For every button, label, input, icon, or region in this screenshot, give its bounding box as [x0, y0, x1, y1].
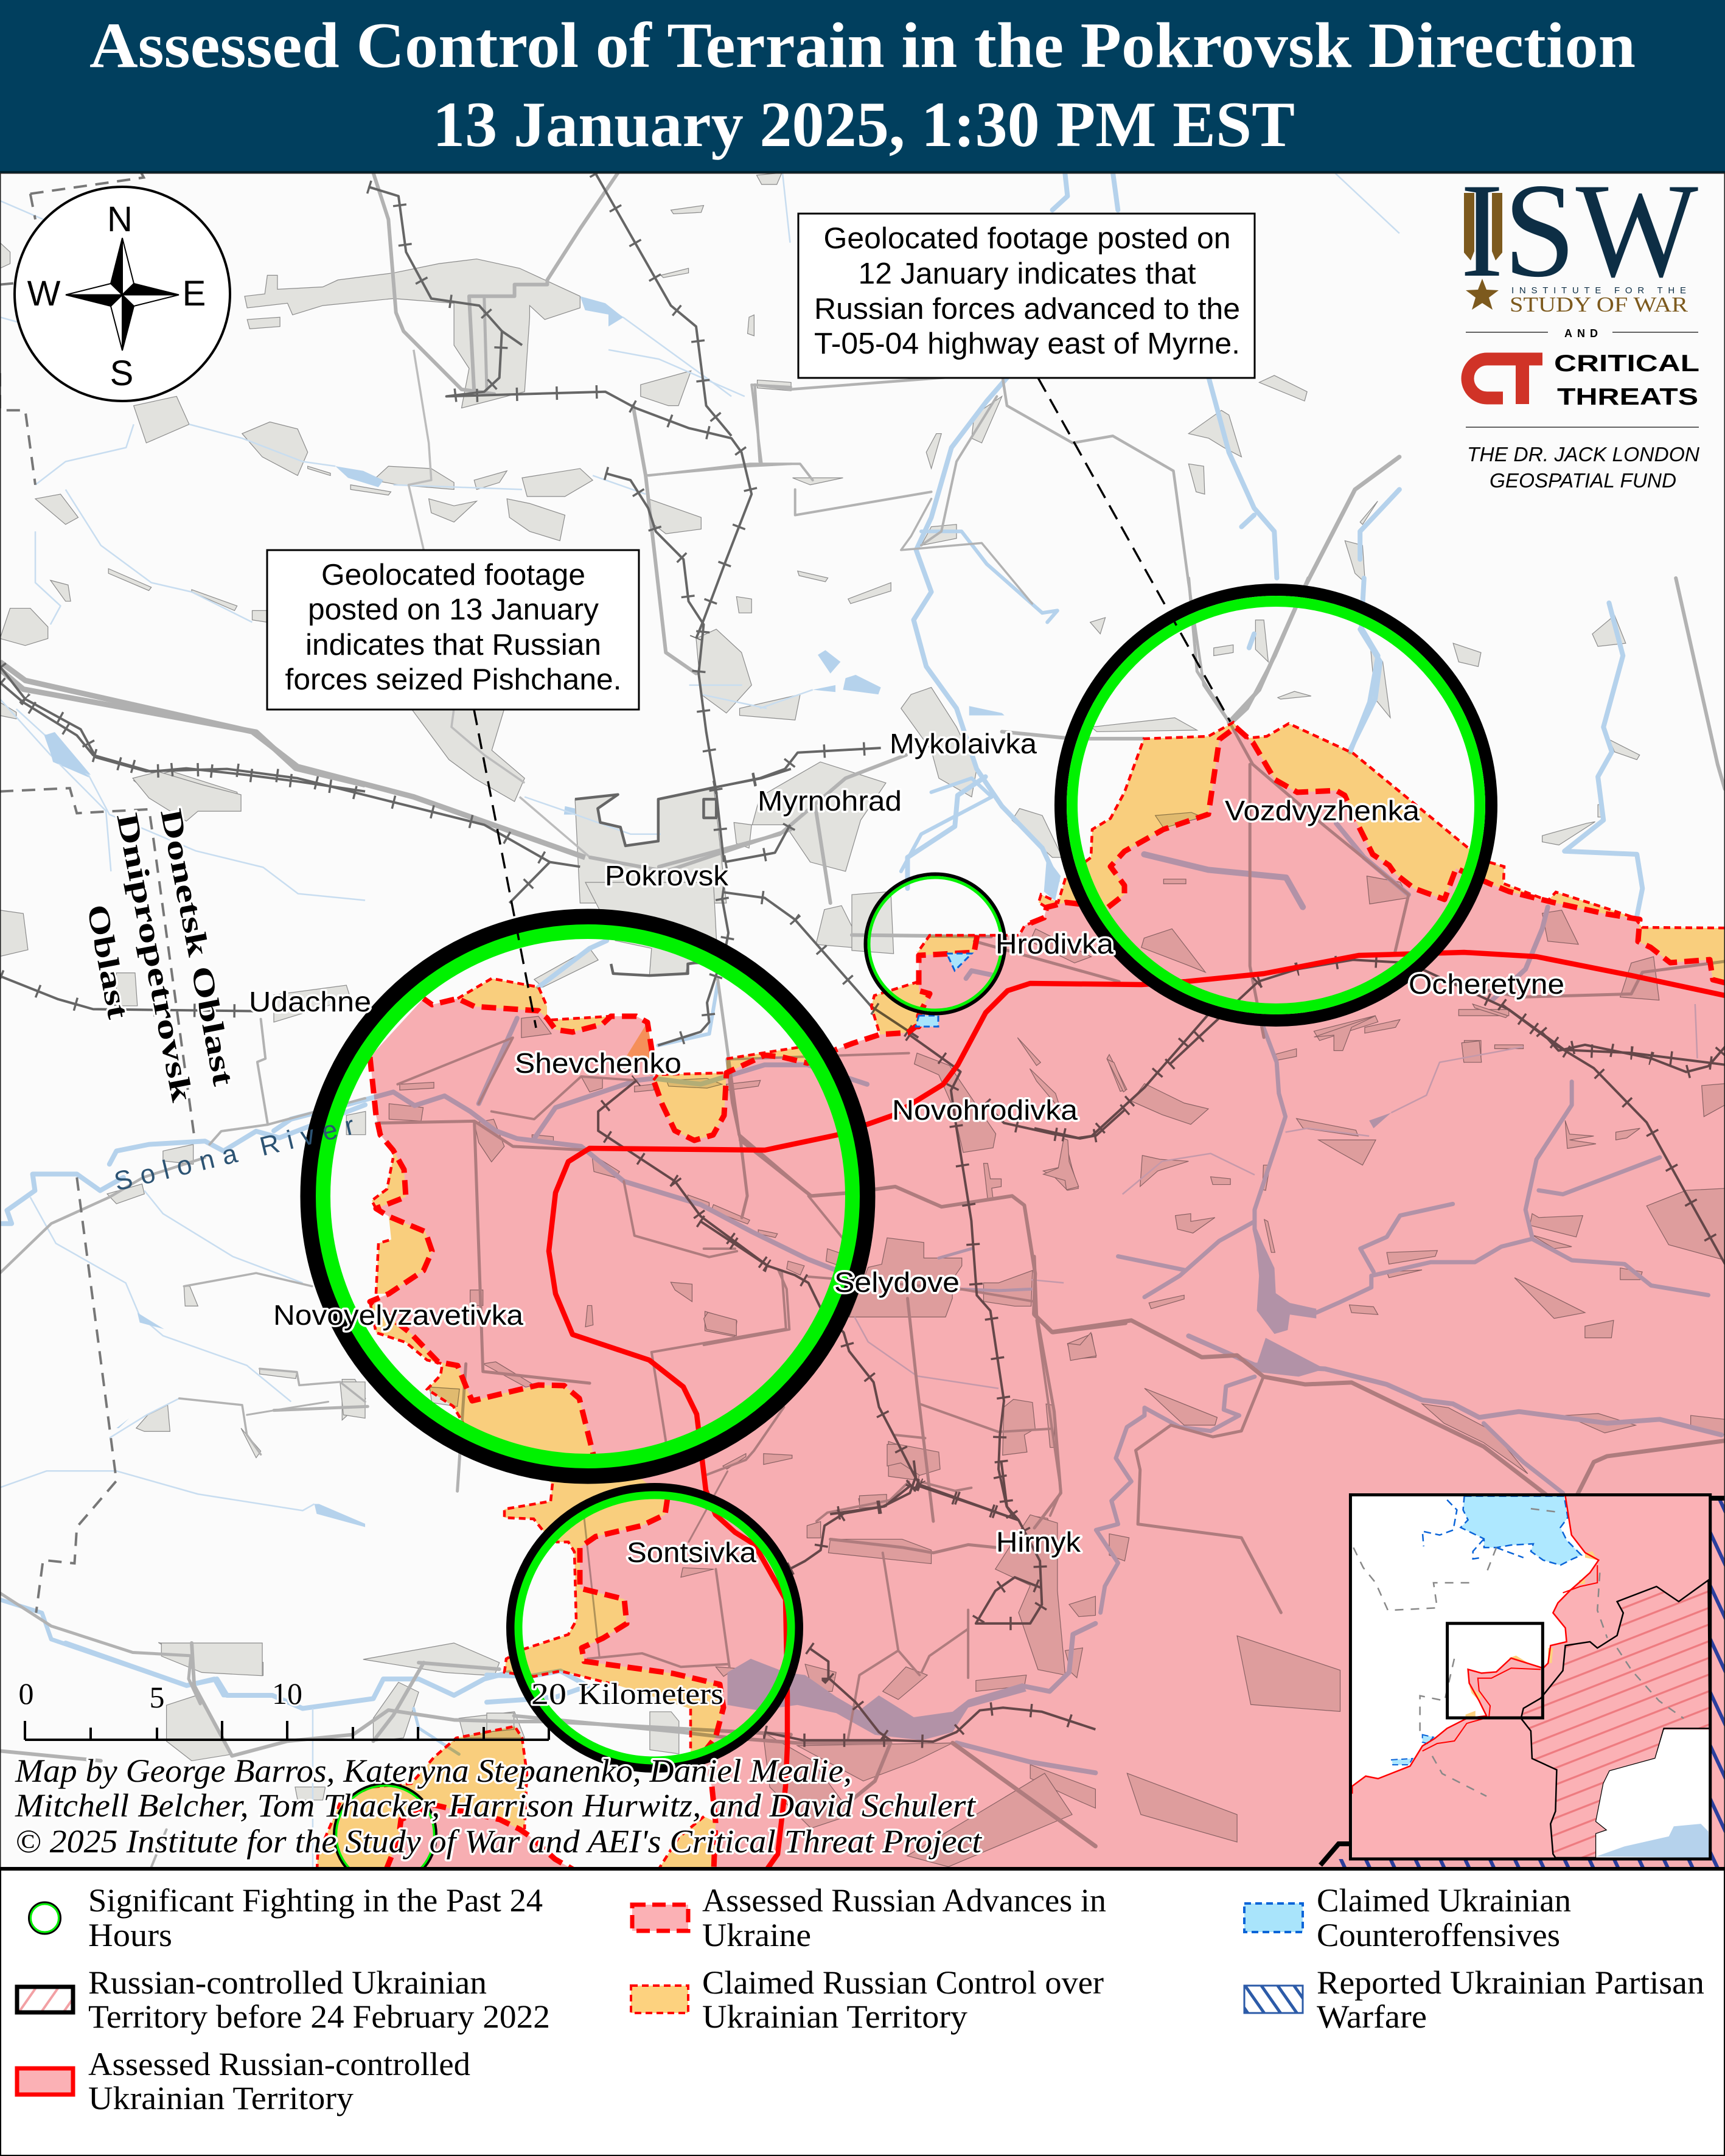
map base: railways [0, 173, 1725, 1742]
logo: ISW: ISW [1460, 156, 1698, 305]
place label: Ocheretyne: Ocheretyne [1409, 968, 1564, 1000]
oblast label: Oblast: Oblast [80, 901, 136, 1022]
logo: ISW: INSTITUTE FOR THE [1511, 285, 1686, 296]
legend item: significant fighting [29, 1882, 543, 1953]
logo divider: AND: AND [1564, 327, 1598, 340]
place label: Selydove: Selydove [834, 1266, 960, 1298]
place label: Novohrodivka: Novohrodivka [892, 1094, 1078, 1126]
place label: Pokrovsk: Pokrovsk [605, 860, 729, 891]
compass rose: E [183, 274, 206, 313]
legend item: significant fighting: Hours [88, 1917, 172, 1953]
map base: rivers and lakes [0, 173, 1721, 1869]
legend item: claimed Russian control: Claimed Russian Control over [702, 1964, 1104, 2001]
callout: Pishchane: Geolocated footage [321, 559, 585, 591]
legend item: territory before 2022 [17, 1964, 550, 2035]
legend item: territory before 2022: Territory before 24 February 2022 [88, 1998, 550, 2035]
significant fighting ring: Vozdvyzhenka [1061, 590, 1491, 1020]
place label: Sontsivka: Sontsivka [627, 1537, 756, 1568]
hatched edge of map: partisan warfare area [1320, 1498, 1725, 1869]
river label: Solona River: Solona River [111, 1111, 357, 1197]
logo: Geospatial Fund [1467, 443, 1699, 492]
map frame edge [0, 173, 1725, 1871]
inset: pre-war control line [1423, 1565, 1597, 1751]
significant fighting ring: Sontsivka [511, 1487, 799, 1768]
inset: occupied Ukraine [1352, 1496, 1710, 1858]
claimed Ukrainian counteroffensive spots [916, 954, 972, 1027]
legend panel [0, 1869, 1725, 2155]
place label: Udachne: Udachne [249, 986, 371, 1017]
map base: roads [0, 173, 1725, 1867]
inset: extent rectangle [1448, 1624, 1542, 1718]
place label: Hirnyk: Hirnyk [996, 1526, 1081, 1558]
logo: ISW: STUDY OF WAR [1510, 293, 1688, 316]
legend item: assessed advances: Assessed Russian Advances in [702, 1882, 1106, 1919]
legend item: assessed Russian-controlled [17, 2046, 470, 2116]
logo: Critical Threats: CRITICAL [1554, 351, 1699, 377]
compass rose: W [27, 274, 61, 313]
significant fighting ring: southwest [334, 1784, 436, 1886]
secondary Russian-controlled pocket at bottom [386, 1805, 575, 1871]
assessed Russian advances thick dashed front line [370, 727, 1725, 1871]
legend item: assessed Russian-controlled: Assessed Russian-controlled [88, 2046, 470, 2082]
inset: Ukrainian counteroffensive area [1460, 1496, 1581, 1565]
legend item: partisan warfare: Reported Ukrainian Partisan [1317, 1964, 1704, 2001]
oblast label: Dnipropetrovsk: Dnipropetrovsk [110, 810, 200, 1105]
callout leader line: Pishchane [474, 710, 536, 1028]
place label: Shevchenko: Shevchenko [515, 1047, 681, 1079]
callout: Myrne highway: Geolocated footage posted on [824, 222, 1230, 255]
inset: occupied since 2014 hatch [1521, 1580, 1710, 1858]
legend item: claimed Russian control [631, 1964, 1104, 2035]
place label: Novoyelyzavetivka: Novoyelyzavetivka [273, 1299, 523, 1331]
callout: Pishchane: indicates that Russian [305, 629, 601, 661]
Russian-controlled territory fill [370, 727, 1725, 1871]
scale bar: Kilometers [578, 1676, 723, 1711]
logo: Critical Threats: THREATS [1557, 384, 1698, 410]
inset locator map [1350, 1495, 1710, 1859]
legend item: assessed Russian-controlled: Ukrainian Territory [88, 2080, 354, 2116]
solid red line: prior Russian control boundary [549, 952, 1725, 1871]
map background [0, 173, 1725, 1871]
logo: Geospatial Fund: GEOSPATIAL FUND [1490, 469, 1676, 492]
callout: Pishchane: posted on 13 January [308, 593, 599, 626]
callout: Myrne highway: T-05-04 highway east of Myrne. [814, 327, 1240, 360]
significant fighting ring: Hrodivka [865, 874, 1005, 1014]
oblast label: Donetsk Oblast: Donetsk Oblast [154, 806, 241, 1089]
map credits: Map by George Barros, Kateryna Stepanenko, Daniel Mealie, [15, 1753, 852, 1789]
map credits [15, 1753, 983, 1860]
callout: Pishchane [267, 550, 639, 710]
inset: Crimea-side white area [1596, 1729, 1710, 1858]
map credits: © 2025 Institute for the Study of War and AEI's Critical Threat Project [15, 1823, 983, 1860]
callout leader line: Myrne [1038, 378, 1230, 722]
title banner: Assessed Control of Terrain in the Pokrovsk Direction [89, 10, 1636, 81]
legend item: territory before 2022: Russian-controlled Ukrainian [88, 1964, 487, 2001]
logo divider [1466, 427, 1699, 428]
callout: Pishchane: forces seized Pishchane. [285, 663, 622, 696]
legend item: Ukrainian counteroffensives: Claimed Ukrainian [1317, 1882, 1571, 1919]
inset: small counteroffensive patches [1392, 1735, 1434, 1765]
legend item: Ukrainian counteroffensives: Counteroffensives [1317, 1917, 1560, 1953]
place label: Hrodivka: Hrodivka [995, 928, 1113, 960]
compass rose: S [110, 354, 133, 393]
compass rose [15, 187, 230, 401]
logo: Geospatial Fund: THE DR. JACK LONDON [1467, 443, 1699, 466]
legend item: partisan warfare [1244, 1964, 1704, 2035]
title banner: 13 January 2025, 1:30 PM EST [433, 89, 1295, 160]
legend item: assessed advances: Ukraine [702, 1917, 811, 1953]
inset: sea [1596, 1824, 1710, 1858]
oblast boundary dashed line [0, 173, 195, 1613]
scale bar: 0 [18, 1676, 34, 1711]
place label: Myrnohrad: Myrnohrad [758, 785, 902, 817]
title banner [0, 0, 1725, 173]
scale bar [18, 1676, 723, 1740]
compass rose: N [107, 200, 133, 239]
legend item: partisan warfare: Warfare [1317, 1998, 1427, 2035]
place label: Vozdvyzhenka: Vozdvyzhenka [1225, 795, 1420, 826]
scale bar: 10 [272, 1676, 302, 1711]
scale bar: 5 [150, 1680, 164, 1714]
callout: Myrne highway: 12 January indicates that [858, 257, 1196, 290]
legend item: significant fighting: Significant Fighting in the Past 24 [88, 1882, 543, 1919]
map credits: Mitchell Belcher, Tom Thacker, Harrison Hurwitz, and David Schulert [15, 1787, 977, 1824]
inset: front line [1352, 1496, 1598, 1794]
legend item: Ukrainian counteroffensives [1244, 1882, 1571, 1953]
scale bar: 20 [531, 1676, 566, 1711]
claimed Russian control areas [317, 722, 1725, 1871]
logo: Critical Threats [1468, 351, 1699, 410]
inset: detached counteroffensive lines [1423, 1500, 1524, 1559]
place label: Mykolaivka: Mykolaivka [890, 728, 1037, 759]
inset: dashed oblast boundaries [1353, 1509, 1684, 1796]
legend item: assessed advances [632, 1882, 1106, 1953]
map base: urban areas [0, 173, 1725, 1867]
callout: Myrne highway [798, 214, 1255, 378]
significant fighting ring: Shevchenko / Selydove [308, 916, 868, 1476]
inset: claimed areas along front [1466, 1551, 1597, 1717]
legend item: claimed Russian control: Ukrainian Territory [702, 1998, 967, 2035]
inset: frame [1350, 1495, 1710, 1859]
callout: Myrne highway: Russian forces advanced to the [814, 293, 1240, 326]
